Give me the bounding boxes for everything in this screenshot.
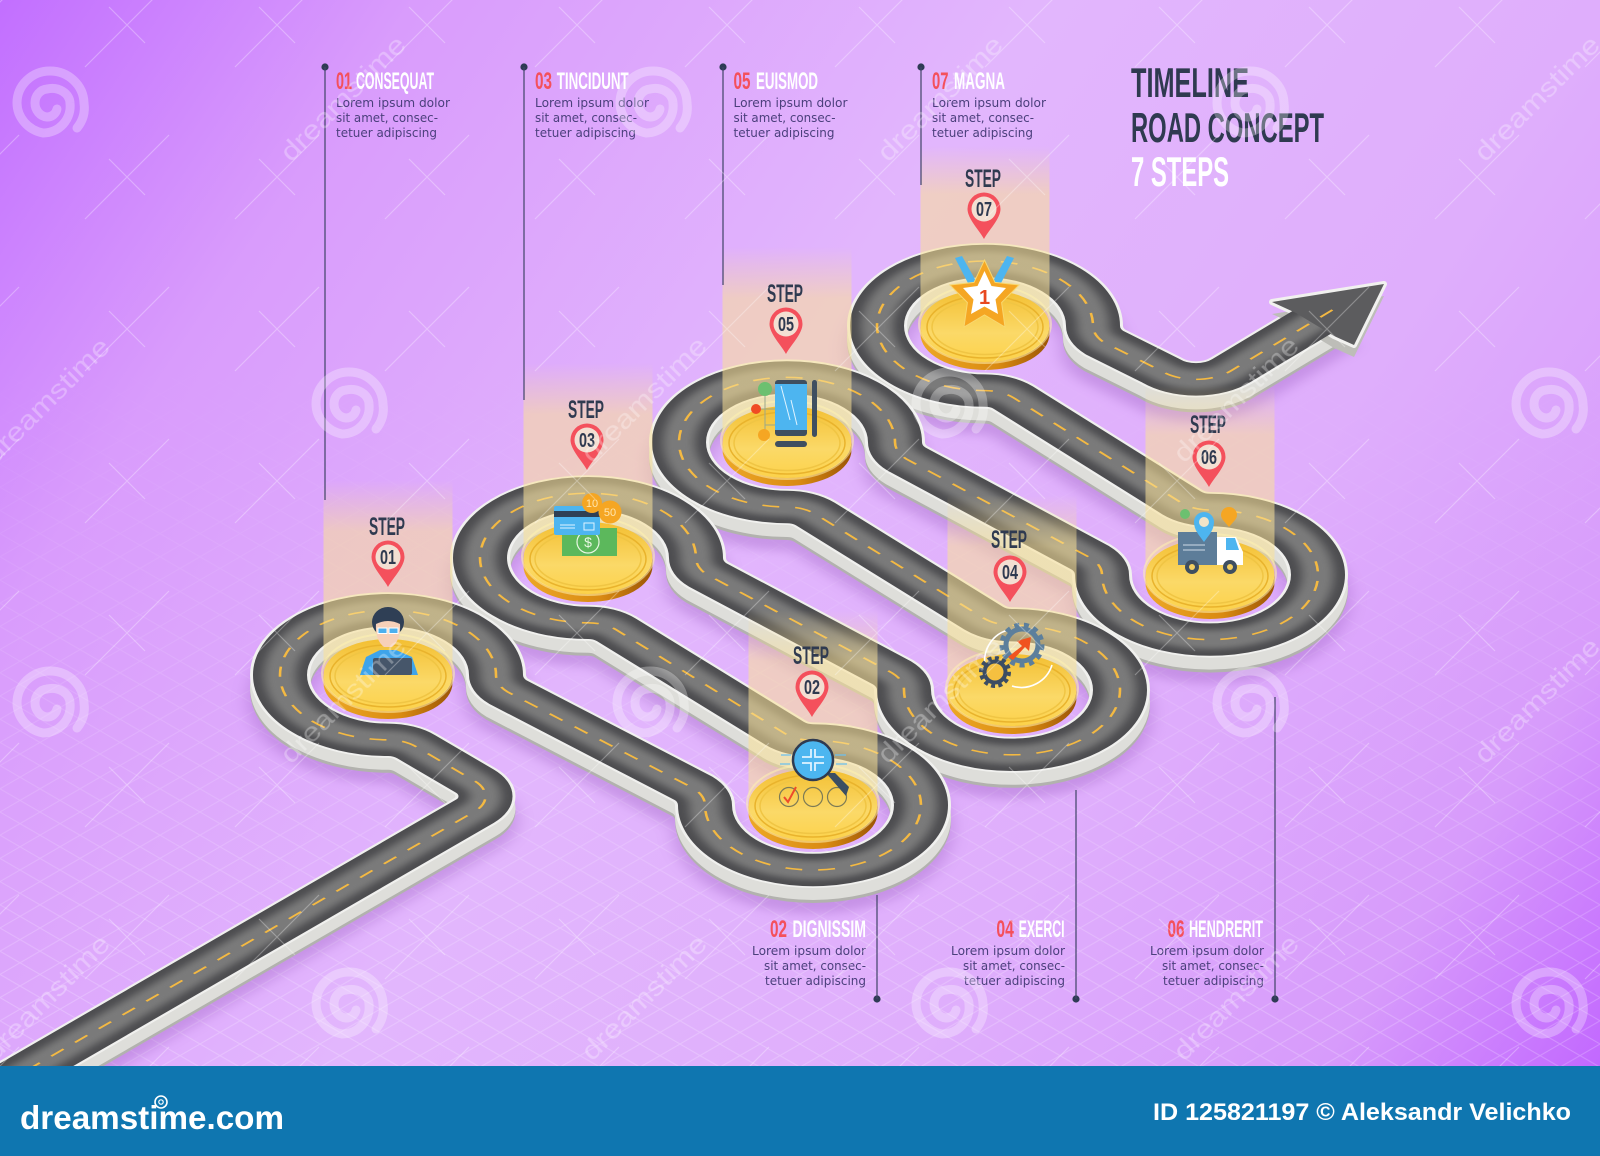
- title: ROAD CONCEPT: [1131, 104, 1324, 151]
- step marker 01: STEP: [369, 513, 405, 541]
- watermark overlay: dreamstime: [274, 29, 412, 167]
- road with curbs and lane markings: [0, 261, 1384, 1121]
- label: 02 dignissim: Lorem ipsum dolor: [752, 944, 866, 958]
- light beam: step 01: [324, 480, 452, 713]
- label: 02 dignissim: 02: [770, 916, 787, 943]
- label: 03 tincidunt: 03: [535, 68, 552, 95]
- label: 04 exerci: [951, 916, 1065, 988]
- title: TIMELINE: [1131, 59, 1249, 106]
- step marker 07: [965, 165, 1001, 239]
- label: 07 magna: MAGNA: [954, 68, 1005, 95]
- step marker 06: [1190, 411, 1226, 487]
- label: 04 exerci: sit amet, consec-: [963, 959, 1065, 973]
- step marker 04: STEP: [991, 526, 1027, 554]
- leader line: 05: [719, 63, 727, 285]
- label: 01 consequat: CONSEQUAT: [356, 68, 434, 95]
- light beam: step 07: [920, 146, 1050, 364]
- label: 04 exerci: Lorem ipsum dolor: [951, 944, 1065, 958]
- title: 7 STEPS: [1131, 148, 1229, 195]
- label: 01 consequat: [336, 68, 450, 140]
- leader line: 07: [917, 63, 925, 185]
- step marker 06: STEP: [1190, 411, 1226, 439]
- watermark overlay: dreamstime: [575, 330, 713, 468]
- step marker 05: 05: [778, 314, 794, 336]
- watermark overlay: dreamstime: [1167, 928, 1305, 1066]
- icon: credit card, banknote and coins: 50: [604, 507, 616, 519]
- label: 01 consequat: sit amet, consec-: [336, 111, 438, 125]
- light beam: step 05: [722, 247, 852, 480]
- label: 07 magna: Lorem ipsum dolor: [932, 96, 1046, 110]
- light beam: step 03: [524, 363, 652, 596]
- leader line: 02: [873, 895, 881, 1003]
- watermark overlay: dreamstime: [274, 631, 412, 769]
- step marker 03: STEP: [568, 396, 604, 424]
- label: 04 exerci: 04: [996, 916, 1014, 943]
- gold coin: step 01: [322, 634, 454, 719]
- leader line: 06: [1271, 697, 1279, 1003]
- gold coin: step 03: [522, 517, 654, 602]
- label: 07 magna: sit amet, consec-: [932, 111, 1034, 125]
- step marker 02: [793, 642, 829, 717]
- icon: credit card, banknote and coins: $: [584, 534, 592, 550]
- watermark overlay: dreamstime: [871, 29, 1009, 167]
- watermark overlay: dreamstime: [575, 928, 713, 1066]
- icon: delivery truck with pins: [1178, 507, 1243, 574]
- label: 06 hendrerit: [1150, 916, 1264, 988]
- label: 05 euismod: Lorem ipsum dolor: [734, 96, 848, 110]
- label: 05 euismod: sit amet, consec-: [734, 111, 836, 125]
- light beam: step 06: [1146, 385, 1274, 613]
- label: 03 tincidunt: sit amet, consec-: [535, 111, 637, 125]
- gold coin: step 02: [747, 764, 879, 849]
- step marker 01: [369, 513, 405, 587]
- label: 02 dignissim: sit amet, consec-: [764, 959, 866, 973]
- icon: smartphone and stylus: [751, 380, 817, 447]
- label: 07 magna: [932, 68, 1046, 140]
- gold coin: step 06: [1144, 534, 1276, 619]
- background grid: [0, 600, 1600, 1066]
- watermark overlay: dreamstime: [871, 631, 1009, 769]
- gold coin: step 07: [919, 285, 1051, 370]
- step marker 04: 04: [1002, 562, 1019, 584]
- step marker 03: 03: [579, 430, 595, 452]
- label: 06 hendrerit: Lorem ipsum dolor: [1150, 944, 1264, 958]
- icon: person at laptop: [360, 607, 418, 675]
- icon: credit card, banknote and coins: [554, 493, 622, 556]
- light beam: step 02: [748, 610, 878, 843]
- label: 05 euismod: [734, 68, 848, 140]
- label: 03 tincidunt: [535, 68, 649, 140]
- icon: credit card, banknote and coins: 10: [586, 498, 598, 510]
- label: 05 euismod: EUISMOD: [756, 68, 818, 95]
- label: 06 hendrerit: tetuer adipiscing: [1163, 974, 1264, 988]
- watermark overlay: dreamstime: [1468, 631, 1600, 769]
- leader line: 04: [1072, 790, 1080, 1003]
- icon: gears with arrow: [981, 625, 1052, 687]
- label: 06 hendrerit: 06: [1168, 916, 1184, 943]
- title: [1131, 59, 1324, 195]
- footer bar: [0, 1066, 1600, 1156]
- step marker 05: STEP: [767, 280, 803, 308]
- label: 03 tincidunt: TINCIDUNT: [557, 68, 629, 95]
- label: 01 consequat: tetuer adipiscing: [336, 126, 437, 140]
- label: 05 euismod: tetuer adipiscing: [734, 126, 834, 140]
- step marker 04: [991, 526, 1027, 602]
- icon: star medal: 1: [979, 287, 990, 309]
- label: 07 magna: 07: [932, 68, 948, 95]
- watermark overlay: dreamstime: [1468, 29, 1600, 167]
- leader line: 03: [520, 63, 528, 400]
- step marker 06: 06: [1201, 447, 1217, 469]
- icon: star medal: [950, 256, 1019, 327]
- step marker 02: 02: [804, 677, 820, 699]
- footer bar: dreamstime.com: [20, 1099, 284, 1136]
- gold coin: step 05: [721, 401, 853, 486]
- footer bar: ID 125821197 © Aleksandr Velichko: [1153, 1099, 1571, 1126]
- label: 02 dignissim: [752, 916, 866, 988]
- step marker 07: STEP: [965, 165, 1001, 193]
- step marker 02: STEP: [793, 642, 829, 670]
- label: 06 hendrerit: HENDRERIT: [1189, 916, 1263, 943]
- label: 07 magna: tetuer adipiscing: [932, 126, 1033, 140]
- step marker 03: [568, 396, 604, 470]
- label: 03 tincidunt: Lorem ipsum dolor: [535, 96, 649, 110]
- label: 01 consequat: 01: [336, 68, 352, 95]
- step marker 05: [767, 280, 803, 354]
- label: 04 exerci: EXERCI: [1019, 916, 1065, 943]
- leader line: 01: [321, 63, 329, 500]
- label: 04 exerci: tetuer adipiscing: [964, 974, 1065, 988]
- step marker 01: 01: [380, 547, 396, 569]
- label: 03 tincidunt: tetuer adipiscing: [535, 126, 636, 140]
- label: 02 dignissim: tetuer adipiscing: [765, 974, 866, 988]
- step marker 07: 07: [976, 199, 992, 221]
- label: 06 hendrerit: sit amet, consec-: [1162, 959, 1264, 973]
- icon: magnifier and checkboxes: [780, 740, 849, 806]
- watermark overlay: dreamstime: [1167, 330, 1305, 468]
- gold coin: step 04: [946, 649, 1078, 734]
- label: 02 dignissim: DIGNISSIM: [792, 916, 866, 943]
- light beam: step 04: [948, 495, 1076, 728]
- label: 05 euismod: 05: [734, 68, 750, 95]
- label: 01 consequat: Lorem ipsum dolor: [336, 96, 450, 110]
